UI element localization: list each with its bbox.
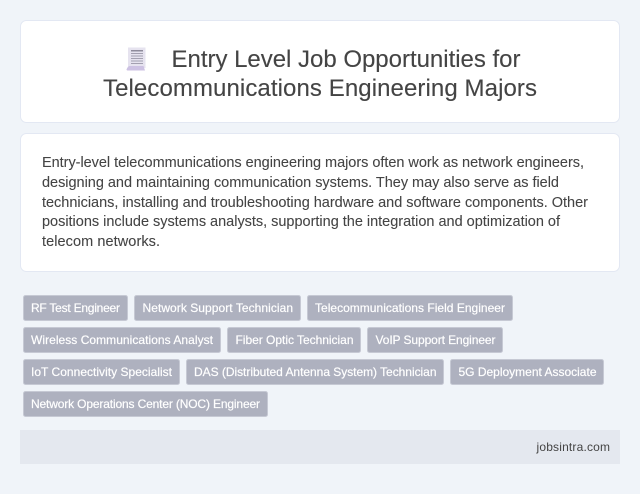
description text: Entry-level telecommunications engineering majors often work as network engineers, [42,155,584,171]
footer text: jobsintra.com [536,440,610,454]
tag: Network Operations Center (NOC) Engineer [24,392,268,416]
tag: Telecommunications Field Engineer: Telecommunications Field Engineer [315,301,505,315]
tag: Telecommunications Field Engineer [308,296,512,320]
tag: IoT Connectivity Specialist [24,360,180,384]
tag: Network Support Technician [134,296,300,320]
panel: title card [20,20,620,122]
tag: Network Operations Center (NOC) Engineer: Network Operations Center (NOC) Engineer [31,397,260,411]
panel: description [20,134,620,272]
title: Entry Level Job Opportunities for [172,46,520,73]
tag list [24,296,604,416]
description text: positions include systems analysts, supporting the integration and optimization of [42,214,561,230]
tag: IoT Connectivity Specialist: IoT Connectivity Specialist [31,365,173,379]
tag: Network Support Technician: Network Support Technician [142,301,293,315]
description text: designing and maintaining communication systems. They may also serve as field [42,175,559,191]
description text: telecom networks. [42,234,160,250]
tag: DAS Technician: DAS (Distributed Antenna System) Technician [194,365,436,379]
tag: 5G Deployment Associate: 5G Deployment Associate [458,365,597,379]
tag: Fiber Optic Technician: Fiber Optic Technician [236,333,354,347]
tag: RF Test Engineer [24,296,128,320]
icon: document scroll [126,48,146,70]
tag: Fiber Optic Technician [228,328,360,352]
tag: RF Test Engineer: RF Test Engineer [31,301,120,315]
description text: technicians, installing and troubleshooting hardware and software components. Other [42,195,588,211]
tag: DAS Technician [186,360,444,384]
tag: 5G Deployment Associate [450,360,604,384]
title [103,46,537,102]
tag: Wireless Communications Analyst: Wireless Communications Analyst [31,333,214,347]
footer bar [20,430,620,464]
tag: VoIP Support Engineer: VoIP Support Engineer [376,333,496,347]
tag: VoIP Support Engineer [368,328,502,352]
tag: Wireless Communications Analyst [24,328,220,352]
title: Telecommunications Engineering Majors [103,75,537,102]
description text [42,155,588,250]
